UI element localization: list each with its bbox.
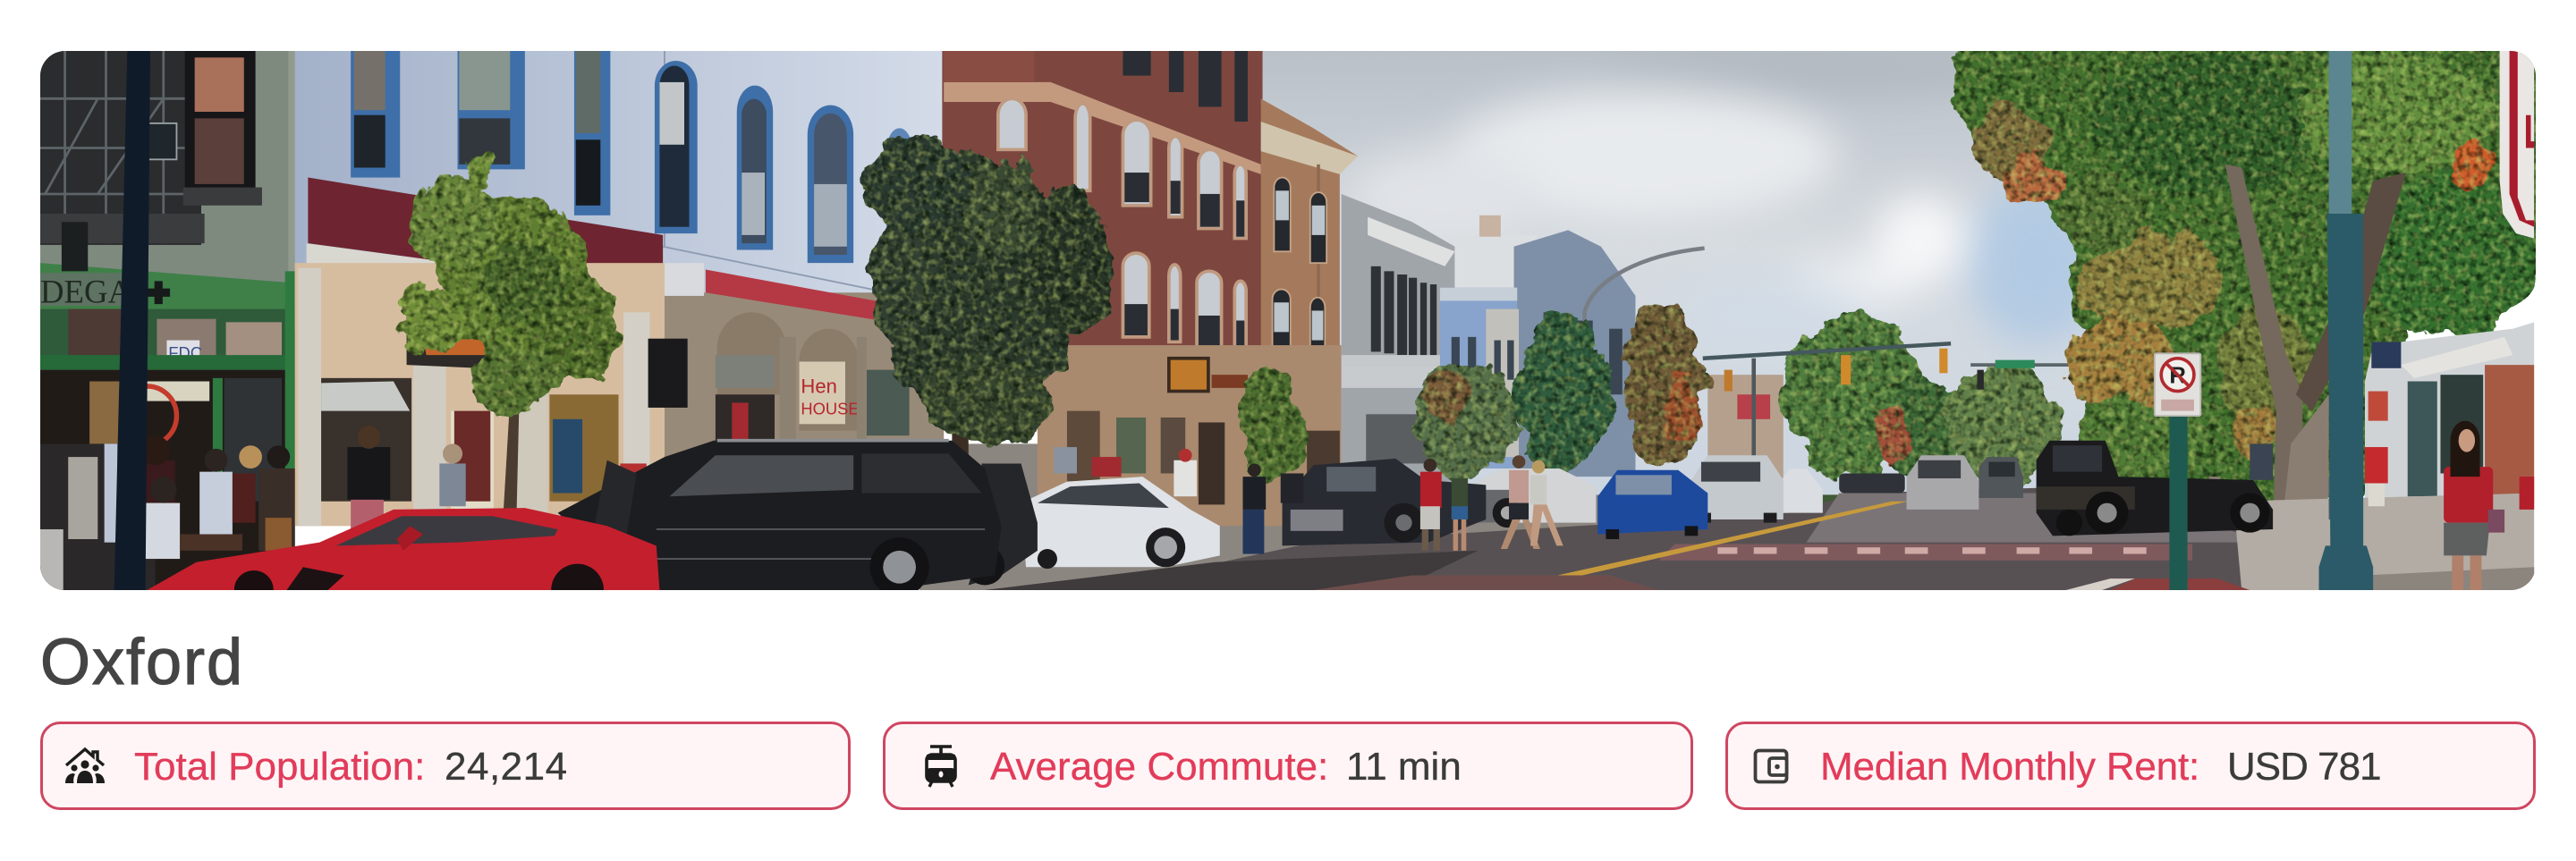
upper windows (351, 51, 912, 280)
teal lamp pole, right (2319, 51, 2373, 590)
label: median monthly rent: Median Monthly Rent: (1820, 745, 2199, 789)
arched windows (998, 98, 1246, 355)
building: green storefront with fire escape: DEGA (40, 273, 131, 309)
building: light blue brick: HOUSE (801, 399, 860, 418)
building: tan brick with cornice (1261, 98, 1358, 494)
building: light blue brick: Hen (801, 375, 837, 397)
street pole, left (62, 51, 150, 590)
stat card: total population (40, 722, 851, 810)
photo: Oxford main street panorama (40, 51, 2536, 590)
title: Oxford (40, 627, 244, 698)
red sports car (147, 508, 659, 616)
building: green storefront with fire escape: FDC (168, 343, 202, 362)
value: 24,214: 24,214 (445, 745, 568, 789)
sky with clouds (1248, 47, 2233, 494)
big autumn street trees on the right (1954, 0, 2576, 590)
car: dark SUV behind black SUV (965, 463, 1038, 585)
buildings: grey and blue further down the street (1342, 194, 1705, 494)
red-bordered sign, top right (2500, 51, 2534, 239)
street-level base behind cars and trees (919, 443, 2250, 590)
value: USD 781: USD 781 (2227, 745, 2381, 789)
shop buildings lower right (2365, 322, 2534, 510)
red shingle canopy (308, 178, 663, 291)
stat card: median monthly rent (1725, 722, 2536, 810)
icon: wallet (1753, 749, 1789, 783)
no parking sign on post: R (2169, 363, 2186, 388)
ground floor of brick block (1038, 345, 1342, 526)
icon: house with people (65, 747, 105, 783)
tree trunks (2207, 165, 2406, 590)
label: total population: Total Population: (134, 745, 425, 789)
far end of street: tan building (1707, 375, 1784, 490)
car: white sedan (1021, 477, 1220, 569)
cars: distant street traffic (1691, 455, 2023, 523)
building: green storefront with fire escape (40, 51, 301, 590)
pickup truck on the right (2037, 441, 2273, 536)
no parking sign on post (2155, 353, 2200, 590)
label: average commute: Average Commute: (990, 745, 1328, 789)
woman in red shirt (2444, 421, 2534, 590)
traffic signal arms (1703, 343, 2094, 460)
black SUV (558, 441, 1001, 596)
ground floor shops (295, 263, 665, 526)
stat card: average commute (883, 722, 1693, 810)
building: light blue brick (295, 51, 944, 526)
people at the left cafe (40, 426, 647, 590)
building: red brick corner block (942, 51, 1263, 355)
value: 11 min: 11 min (1346, 745, 1462, 789)
icon: tram (925, 745, 957, 788)
tree: young green tree in front of shops (394, 151, 617, 510)
cars: grey sedan, blue hatchback and dark SUV (1283, 459, 1707, 545)
tree: large dark tree in front of brick block (860, 138, 1113, 513)
trees along middle of street (1240, 304, 2059, 484)
road surface and crosswalk (985, 486, 2534, 590)
pedestrians in the mid street (1054, 443, 2388, 554)
